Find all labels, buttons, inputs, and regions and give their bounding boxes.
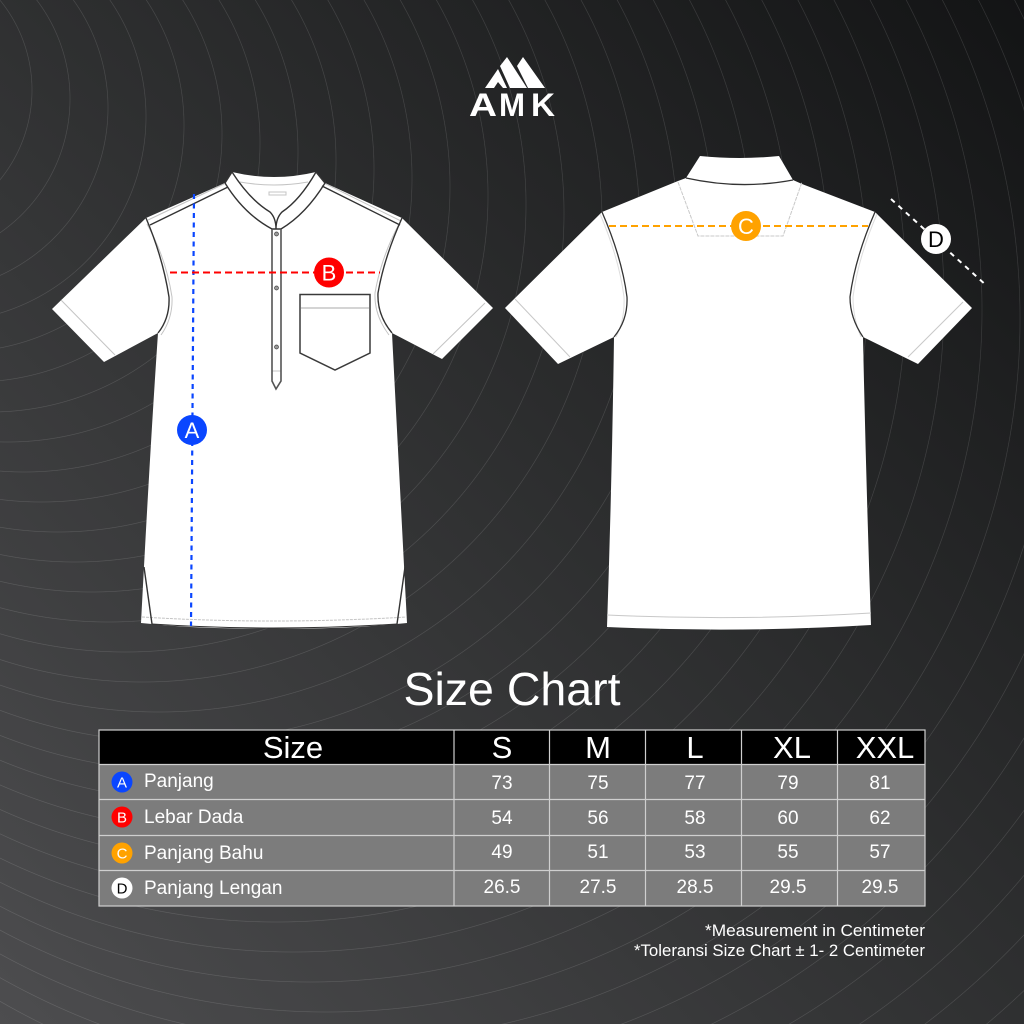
chest pocket: [300, 294, 370, 370]
row: Panjang: 77: [684, 773, 706, 794]
row: Panjang: [112, 771, 891, 794]
table body fill: [99, 764, 925, 906]
table header row: S: [492, 730, 512, 765]
row: Panjang Bahu: [112, 842, 891, 864]
row: Lebar Dada: 58: [684, 808, 706, 829]
badge D: [921, 224, 951, 254]
row: Lebar Dada: 62: [869, 808, 891, 829]
row: Lebar Dada: 54: [491, 808, 513, 829]
back shirt stitching: [515, 182, 963, 618]
footnotes: *Toleransi Size Chart ± 1- 2 Centimeter: [634, 941, 925, 960]
logo: AMK: M: [499, 87, 525, 123]
row: Panjang Bahu: 53: [684, 842, 706, 863]
row: Panjang Bahu: C: [117, 846, 128, 862]
table header row: L: [686, 730, 704, 765]
logo: AMK: K: [531, 87, 555, 123]
row: Panjang Lengan: Panjang Lengan: [144, 878, 282, 899]
row: Panjang Lengan: 27.5: [580, 877, 616, 898]
back shirt seams: [602, 178, 875, 337]
row: Panjang: 81: [869, 773, 891, 794]
back shirt body silhouette: [505, 156, 972, 630]
front shirt seams: [144, 172, 405, 628]
table header row: Size: [263, 730, 323, 765]
footnotes: *Measurement in Centimeter: [705, 921, 925, 940]
logo: AMK: [469, 57, 555, 123]
row: Lebar Dada: B: [117, 810, 127, 826]
front shirt buttons: [274, 232, 278, 349]
badge B: [314, 258, 344, 288]
measurement D line: [891, 199, 987, 286]
row: Panjang Lengan: D: [117, 880, 128, 898]
row: Panjang Lengan: 28.5: [677, 877, 713, 898]
table header row: [99, 730, 925, 765]
badge C: C: [738, 214, 754, 239]
table header row: XXL: [856, 730, 914, 765]
row: Lebar Dada: Lebar Dada: [144, 807, 244, 828]
row: Panjang Bahu: 57: [869, 842, 891, 863]
row: Panjang: A: [117, 774, 127, 792]
footnotes: [634, 921, 925, 960]
row: Panjang Lengan: 26.5: [484, 877, 520, 898]
front shirt stitching: [61, 182, 485, 621]
row: Panjang: 73: [491, 773, 513, 794]
row: Panjang: 79: [777, 773, 799, 794]
front shirt body silhouette: [52, 172, 493, 628]
badge C: [731, 211, 761, 241]
table grid: [99, 730, 925, 906]
back shirt: [505, 156, 987, 630]
row: Panjang: Panjang: [144, 771, 214, 792]
row: Panjang Bahu: 55: [777, 842, 799, 863]
title: Size Chart: [403, 663, 621, 715]
row: Lebar Dada: [112, 806, 891, 829]
row: Panjang: 75: [587, 773, 609, 794]
row: Panjang Lengan: 29.5: [862, 877, 898, 898]
row: Panjang Bahu: 51: [587, 842, 609, 863]
badge D: D: [928, 227, 944, 252]
badge A: [177, 415, 207, 445]
badge A: A: [185, 418, 200, 443]
row: Panjang Bahu: 49: [491, 842, 513, 863]
measurement C line: [609, 225, 868, 227]
size table: [99, 730, 925, 906]
logo: AMK: A: [469, 87, 497, 123]
measurement B line: [170, 272, 380, 274]
row: Panjang Lengan: [112, 877, 898, 899]
row: Panjang Bahu: Panjang Bahu: [144, 843, 263, 864]
table header row: M: [585, 730, 611, 765]
row: Panjang Lengan: 29.5: [770, 877, 806, 898]
front shirt: [52, 172, 493, 628]
table header row: XL: [773, 730, 811, 765]
row: Lebar Dada: 60: [777, 808, 799, 829]
badge B: B: [322, 260, 336, 286]
row: Lebar Dada: 56: [587, 808, 609, 829]
measurement A line: [191, 194, 194, 626]
